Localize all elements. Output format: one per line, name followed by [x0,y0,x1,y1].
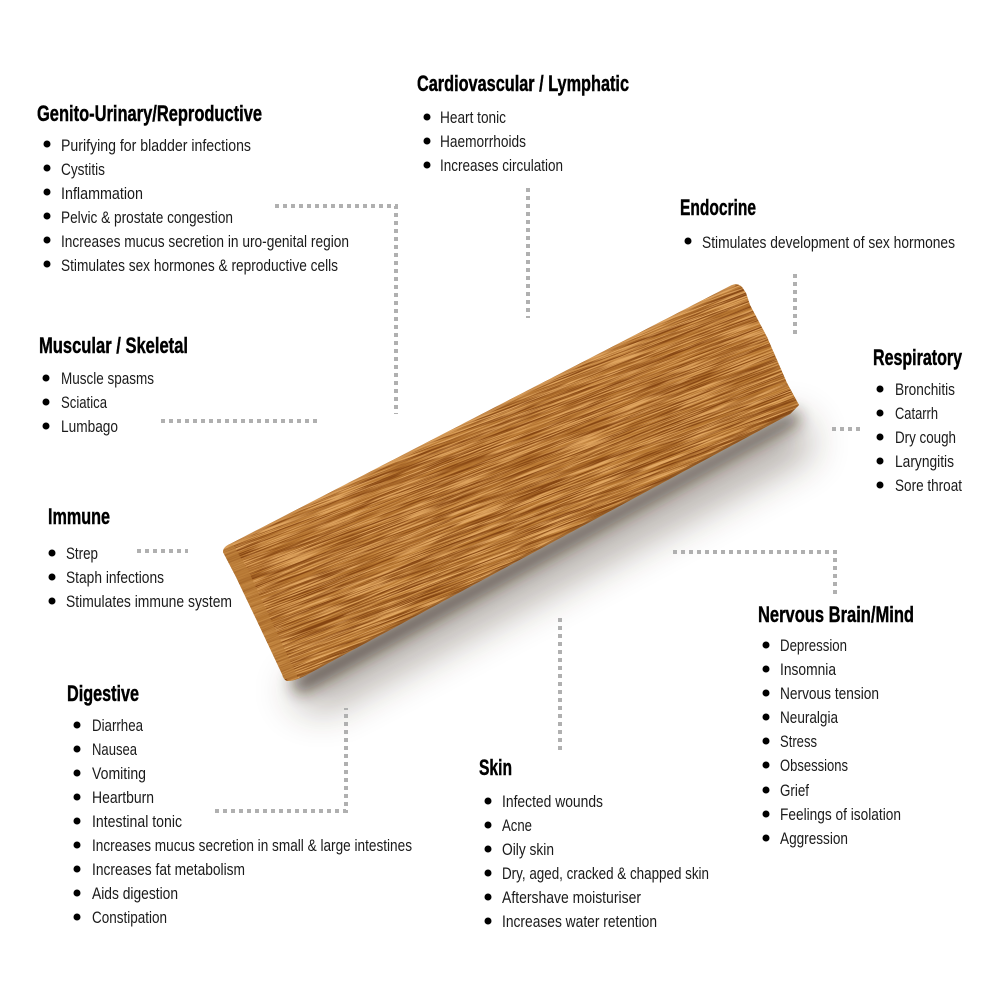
list: Oily skin [502,841,554,859]
list: Neuralgia [780,709,839,727]
list: Increases circulation [440,157,563,175]
connector: endocrine [793,274,797,334]
wooden block [223,284,830,731]
list: Grief [780,782,809,800]
panel: cardiovascular [417,71,629,175]
panel: respiratory [873,345,963,495]
list: Muscle spasms [61,370,154,388]
panel: immune [48,504,232,611]
list: Obsessions [780,757,848,775]
list: Constipation [92,909,167,927]
connector: genito-urinary [275,206,396,414]
list [424,109,563,175]
panel: muscular skeletal [39,333,188,436]
list: Sciatica [61,394,108,412]
list: Diarrhea [92,717,144,735]
list: Inflammation [61,185,143,203]
heading: Cardiovascular / Lymphatic [417,71,629,96]
list: Stimulates immune system [66,593,232,611]
list: Aggression [780,830,848,848]
heading: Respiratory [873,345,963,370]
list: Laryngitis [895,453,954,471]
list [74,717,412,927]
connector: immune [137,549,188,553]
block shadow [285,415,815,712]
heading: Skin [479,755,512,780]
panel: genito-urinary [37,101,349,275]
panel: nervous [758,602,914,848]
list: Acne [502,817,532,835]
list [42,370,154,436]
heading: Endocrine [680,195,756,220]
list: Purifying for bladder infections [61,137,251,155]
list: Strep [66,545,98,563]
list: Sore throat [895,477,962,495]
connector: skin [558,618,562,750]
connector: respiratory [832,427,860,431]
list: Insomnia [780,661,837,679]
list: Nausea [92,741,138,759]
list [484,793,709,931]
list: Dry cough [895,429,956,447]
connector: digestive [215,708,346,811]
panel: endocrine [680,195,955,252]
heading: Muscular / Skeletal [39,333,188,358]
list: Infected wounds [502,793,603,811]
list: Haemorrhoids [440,133,526,151]
connector: cardiovascular [526,188,530,318]
panel: skin [479,755,709,931]
connector: muscular [161,419,317,423]
list: Bronchitis [895,381,955,399]
list: Increases water retention [502,913,657,931]
heading: Immune [48,504,110,529]
list: Increases mucus secretion in small & large intestines [92,837,412,855]
list: Increases mucus secretion in uro-genital region [61,233,349,251]
list: Stimulates development of sex hormones [702,234,955,252]
list: Aids digestion [92,885,178,903]
panel: digestive [67,681,412,927]
list: Dry, aged, cracked & chapped skin [502,865,709,883]
list: Stimulates sex hormones & reproductive cells [61,257,338,275]
list: Feelings of isolation [780,806,901,824]
connector: nervous [673,552,835,594]
list: Cystitis [61,161,105,179]
list: Increases fat metabolism [92,861,245,879]
list: Aftershave moisturiser [502,889,641,907]
list: Heart tonic [440,109,506,127]
list [48,545,232,611]
heading: Genito-Urinary/Reproductive [37,101,262,126]
heading: Nervous Brain/Mind [758,602,914,627]
list: Nervous tension [780,685,879,703]
list: Staph infections [66,569,164,587]
list: Pelvic & prostate congestion [61,209,233,227]
list: Lumbago [61,418,118,436]
heading: Digestive [67,681,139,706]
list: Vomiting [92,765,146,783]
list: Heartburn [92,789,154,807]
list [44,137,349,275]
list: Stress [780,733,817,751]
list [762,637,901,848]
list: Intestinal tonic [92,813,182,831]
list: Depression [780,637,847,655]
wood face [223,284,799,681]
list [876,381,962,495]
list: Catarrh [895,405,938,423]
